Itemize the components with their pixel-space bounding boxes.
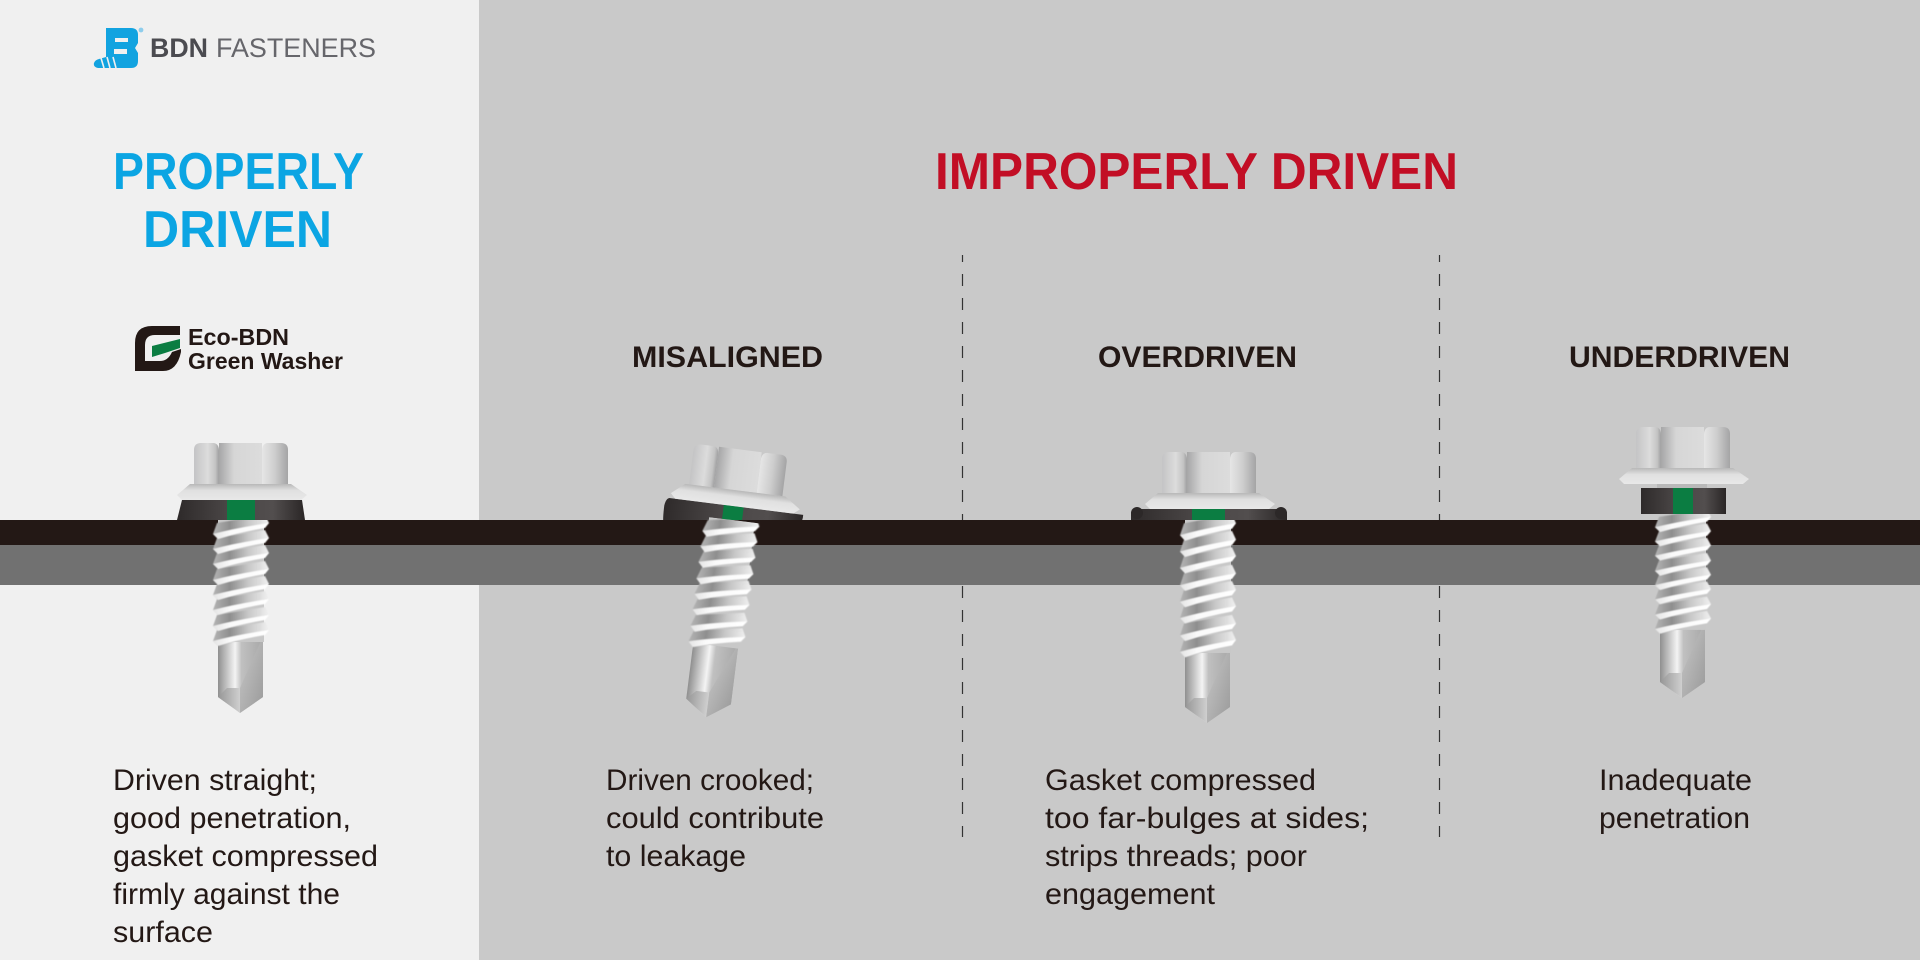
logo: Eco-BDN Green Washer: Green Washer bbox=[188, 348, 343, 374]
text: misaligned description: could contribute bbox=[606, 802, 824, 835]
logo: Eco-BDN Green Washer: Eco-BDN bbox=[188, 324, 289, 350]
screw head: misaligned bbox=[662, 441, 810, 543]
heading: misaligned: MISALIGNED bbox=[632, 341, 823, 374]
screw head: properly driven bbox=[177, 443, 307, 520]
logo: BDN Fasteners: FASTENERS bbox=[216, 33, 376, 63]
screw head: overdriven bbox=[1131, 452, 1287, 520]
text: misaligned description bbox=[606, 764, 824, 873]
steel sheet: dark top layer bbox=[0, 520, 1920, 545]
screw shaft: underdriven bbox=[1655, 509, 1711, 698]
divider: misaligned / overdriven bbox=[962, 255, 964, 837]
logo: BDN Fasteners bbox=[94, 28, 376, 68]
heading: improperly driven: IMPROPERLY DRIVEN bbox=[935, 143, 1458, 201]
heading: properly driven: PROPERLY bbox=[113, 143, 364, 201]
text: properly driven description: firmly against the bbox=[113, 878, 340, 911]
divider: overdriven / underdriven bbox=[1438, 255, 1440, 837]
screw shaft: misaligned bbox=[679, 511, 760, 721]
text: overdriven description: strips threads; poor bbox=[1045, 840, 1307, 873]
text: misaligned description: Driven crooked; bbox=[606, 764, 814, 797]
text: properly driven description: Driven straight; bbox=[113, 764, 317, 797]
text: overdriven description: too far-bulges at sides; bbox=[1045, 802, 1369, 835]
text: overdriven description: engagement bbox=[1045, 878, 1216, 911]
screw shaft: properly driven bbox=[213, 515, 269, 713]
screw shaft: overdriven bbox=[1180, 515, 1236, 723]
text: overdriven description: Gasket compressed bbox=[1045, 764, 1316, 797]
text: overdriven description bbox=[1045, 764, 1369, 911]
text: properly driven description: gasket compressed bbox=[113, 840, 378, 873]
heading: overdriven: OVERDRIVEN bbox=[1098, 341, 1297, 374]
text: properly driven description bbox=[113, 764, 378, 949]
panel: improperly driven background bbox=[479, 0, 1920, 960]
text: properly driven description: surface bbox=[113, 916, 213, 949]
logo: BDN Fasteners: BDN bbox=[150, 33, 208, 63]
heading: properly driven bbox=[113, 143, 364, 259]
screw head: underdriven bbox=[1619, 427, 1749, 514]
panel: properly driven background bbox=[0, 0, 479, 960]
text: underdriven description bbox=[1599, 764, 1752, 835]
steel sheet: gray lower layer bbox=[0, 545, 1920, 585]
text: underdriven description: Inadequate bbox=[1599, 764, 1752, 797]
logo: Eco-BDN Green Washer bbox=[135, 324, 343, 374]
text: properly driven description: good penetration, bbox=[113, 802, 351, 835]
heading: properly driven: DRIVEN bbox=[143, 201, 332, 259]
text: underdriven description: penetration bbox=[1599, 802, 1750, 835]
text: misaligned description: to leakage bbox=[606, 840, 746, 873]
heading: underdriven: UNDERDRIVEN bbox=[1569, 341, 1790, 374]
